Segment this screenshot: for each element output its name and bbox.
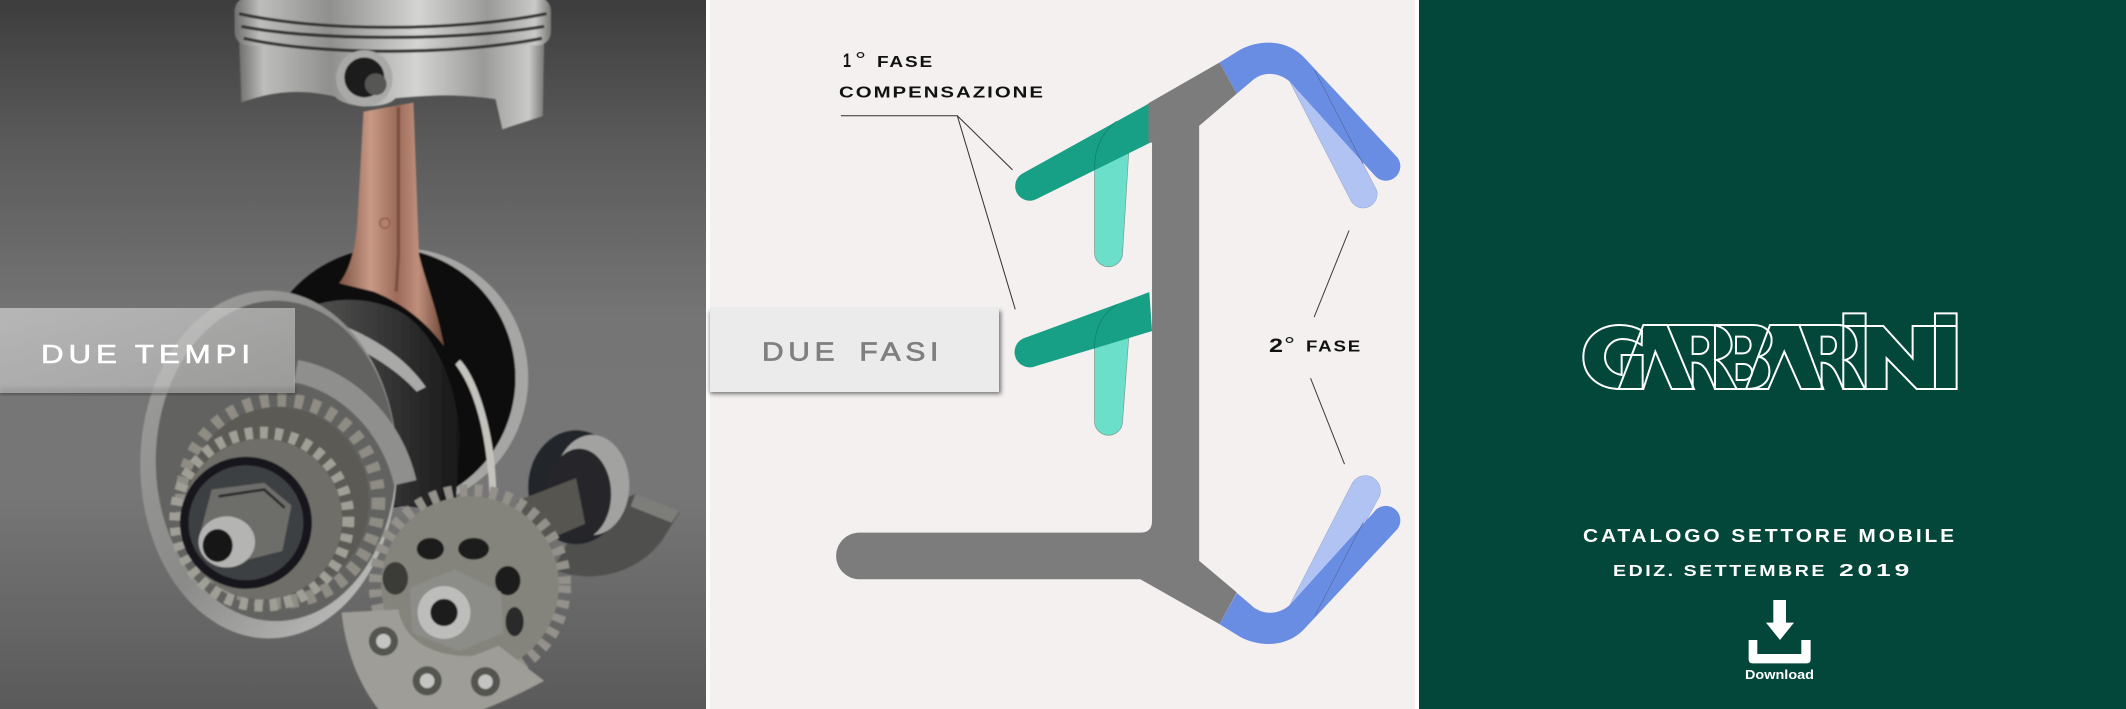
label: 2nd phase: FASE bbox=[1306, 338, 1362, 356]
panel: catalogue cover bbox=[1419, 0, 2126, 709]
lower blue pale phase branch bbox=[1290, 476, 1380, 616]
icon: download bbox=[1749, 600, 1811, 663]
bearing ring behind gears bbox=[296, 371, 405, 483]
label: 1st phase: ° bbox=[855, 49, 866, 72]
connecting rod bbox=[339, 102, 444, 346]
label: due fasi: DUE FASI bbox=[762, 338, 943, 366]
label: 1st phase: FASE bbox=[877, 54, 934, 71]
edition line: EDIZ. SETTEMBRE bbox=[1613, 563, 1827, 580]
branch outlines over the arms bbox=[1095, 121, 1118, 349]
panel: diagram bbox=[710, 0, 1415, 709]
label: due tempi bbox=[0, 308, 296, 394]
label: due tempi: DUE TEMPI bbox=[41, 341, 255, 369]
piston bbox=[235, 0, 551, 129]
counterweight and right bearing bbox=[517, 430, 679, 576]
edition line bbox=[1613, 560, 1913, 580]
hub and nut bbox=[180, 457, 312, 589]
small gear bbox=[375, 490, 565, 680]
lower blue arm bbox=[1220, 506, 1400, 644]
label: 2nd phase: ° bbox=[1284, 334, 1295, 357]
label: 2nd phase: 2 bbox=[1269, 336, 1283, 357]
front disc bbox=[140, 291, 397, 638]
leader lines first phase bbox=[841, 116, 1015, 309]
grey manifold bbox=[836, 63, 1237, 624]
green upper arm bbox=[1015, 103, 1152, 201]
logo: Garbarini bbox=[1583, 313, 1957, 389]
upper blue pale phase branch bbox=[1290, 70, 1377, 208]
download caption: Download bbox=[1745, 667, 1814, 682]
front gear bbox=[175, 433, 348, 606]
upper blue arm bbox=[1220, 43, 1400, 181]
light teal upper compensation branch bbox=[1095, 122, 1129, 267]
label: due fasi bbox=[710, 307, 1001, 394]
light teal lower compensation branch bbox=[1095, 304, 1129, 435]
crank back flywheel bbox=[259, 248, 528, 510]
leader lines second phase bbox=[1311, 231, 1349, 464]
label: 2nd phase bbox=[1269, 334, 1362, 357]
label: 1st phase bbox=[843, 49, 934, 72]
label: 1st phase: 1 bbox=[843, 51, 851, 72]
label: compensazione: COMPENSAZIONE bbox=[839, 84, 1045, 102]
edition line: 2019 bbox=[1839, 560, 1913, 580]
blue overlap outlines bbox=[1315, 70, 1363, 616]
front disc face bbox=[156, 301, 396, 621]
green lower arm bbox=[1015, 292, 1152, 367]
catalogue title: CATALOGO SETTORE MOBILE bbox=[1583, 526, 1957, 546]
front segment with bolts bbox=[342, 609, 544, 709]
panel: engine photo bbox=[0, 0, 706, 709]
rear gear bbox=[182, 400, 378, 602]
